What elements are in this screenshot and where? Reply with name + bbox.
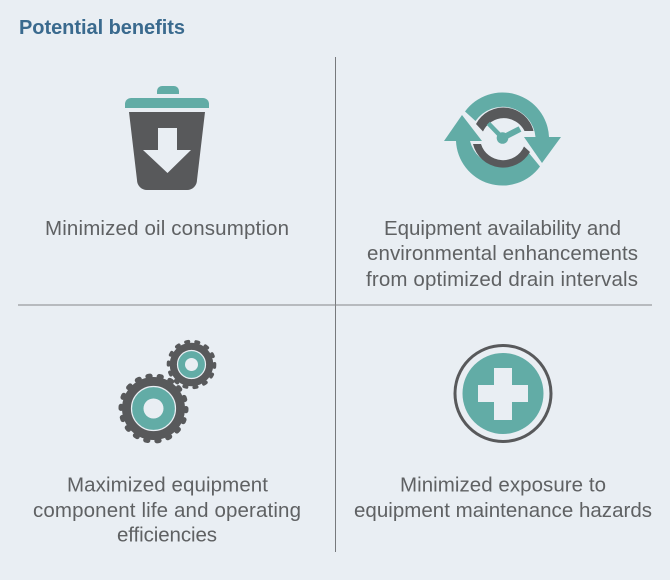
panel: equipment availability [366, 92, 638, 291]
icon: gears [121, 342, 214, 441]
text: component life: Maximized equipment [67, 474, 268, 496]
icon: trash bin with down arrow [125, 86, 209, 190]
text: maintenance hazards [354, 474, 652, 522]
text: component life: component life and operating [33, 499, 301, 522]
text: maintenance hazards: equipment maintenance hazards [354, 499, 652, 522]
panel: oil consumption [45, 86, 289, 240]
text: component life: efficiencies [117, 524, 217, 546]
text: equipment availability: environmental enhancements [367, 242, 638, 265]
text: component life [33, 474, 301, 546]
text: maintenance hazards: Minimized exposure to [400, 474, 606, 496]
title: Potential benefits [19, 17, 185, 39]
icon: medical cross [455, 346, 551, 442]
text: equipment availability: Equipment availability and [384, 217, 621, 240]
panel: component life [33, 342, 301, 546]
text: equipment availability: from optimized drain intervals [366, 268, 638, 291]
text: equipment availability [366, 217, 638, 291]
text: minimized oil consumption: Minimized oil consumption [45, 217, 289, 240]
panel: maintenance hazards [354, 346, 652, 522]
icon: clock with cycle arrows [444, 92, 561, 186]
